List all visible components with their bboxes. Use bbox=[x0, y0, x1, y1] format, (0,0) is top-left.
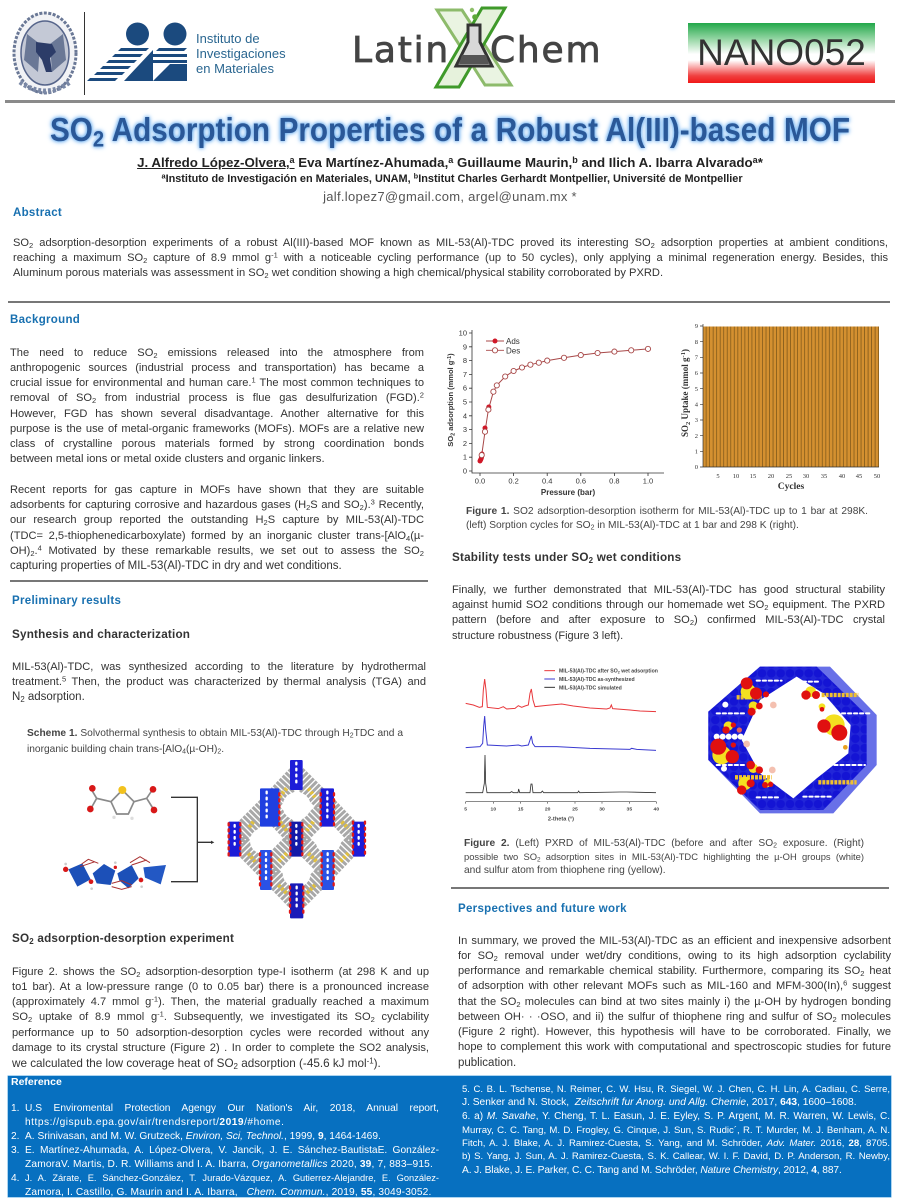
references 1 to 4: 1. bbox=[11, 1103, 20, 1114]
affiliations: aInstituto de Investigación en Materiales, UNAM, bInstitut Charles Gerhardt Montpellier, Université de Montpellier bbox=[161, 172, 743, 185]
text: stability tests: Finally, we further demonstrated that MIL-53(Al)-TDC has good structural stability bbox=[452, 584, 885, 596]
text: background paragraph 2: adsorbents for capturing corrosive and hazardous gases (H2S and SO2).3 Recently, bbox=[10, 498, 424, 512]
chart: SO2 uptake over cycles bbox=[680, 323, 880, 492]
text: adsorption experiment: performance up to 50 adsorption-desorption cycles were recorded without any bbox=[12, 1027, 429, 1039]
divider: background bbox=[10, 580, 428, 582]
chart: SO2 uptake over cycles: 5 bbox=[695, 386, 698, 393]
heading: Reference: Reference bbox=[11, 1076, 62, 1088]
chart: SO2 uptake over cycles: 2 bbox=[695, 433, 698, 440]
chart: SO2 adsorption isotherm: 2 bbox=[450, 433, 456, 436]
references 1 to 4: ZamoraV. Martis, D. R. Williams and I. A. Ibarra, Organometallics 2020, 39, 7, 883–915. bbox=[25, 1159, 433, 1170]
chart: PXRD patterns: 40 bbox=[654, 806, 659, 812]
text: adsorption experiment bbox=[12, 966, 429, 1071]
chart: PXRD patterns: 10 bbox=[491, 806, 496, 812]
caption: Figure 1: Figure 1. SO2 adsorption-desorption isotherm for MIL-53(Al)-TDC up to 1 bar at 298K. bbox=[466, 506, 868, 517]
chart: PXRD patterns: 15 bbox=[518, 806, 524, 812]
MOF lattice bbox=[228, 760, 365, 918]
references 1 to 4: E. Martínez-Ahumada, A. López-Olvera, V. Jancik, J. E. Sánchez-BautistaE. González- bbox=[25, 1145, 439, 1156]
logo: IIM Instituto de Investigaciones en Materiales: Instituto de bbox=[196, 31, 260, 46]
chart: SO2 adsorption isotherm: 2 bbox=[463, 439, 467, 448]
text: perspectives: for SO2 removal under wet/dry conditions, owing to its high adsorption cyclability bbox=[458, 950, 891, 963]
chart: SO2 adsorption isotherm: 10 bbox=[459, 328, 467, 338]
chart: SO2 uptake over cycles: 25 bbox=[786, 473, 792, 480]
chart: PXRD patterns: MIL-53(Al)-TDC as-synthesized bbox=[559, 677, 635, 683]
chart: SO2 uptake over cycles: 8 bbox=[695, 339, 698, 346]
text: perspectives: performance and remarkable chemical stability. Furthermore, comparing its SO2 heat bbox=[458, 965, 891, 978]
caption: Scheme 1: Scheme 1. Solvothermal synthesis to obtain MIL-53(Al)-TDC through H2TDC and a bbox=[27, 728, 403, 740]
chart: SO2 adsorption isotherm: 9 bbox=[463, 342, 467, 351]
chart: SO2 uptake over cycles: 15 bbox=[750, 473, 756, 480]
text: background paragraph 1: anthropogenic sources (industrial process and transportation) has became a bbox=[10, 362, 424, 374]
chart: SO2 adsorption isotherm: 0.2 bbox=[508, 476, 519, 486]
chart: SO2 uptake over cycles: Cycles bbox=[778, 482, 804, 492]
chart: SO2 uptake over cycles: Uptake (mmol g bbox=[680, 357, 690, 422]
chart: SO2 adsorption isotherm: 0.8 bbox=[609, 476, 620, 486]
logo: LatinXChem bbox=[352, 6, 602, 88]
divider: header bbox=[5, 100, 895, 103]
caption: Figure 1 bbox=[466, 506, 868, 532]
references 1 to 4 bbox=[11, 1103, 439, 1198]
text: abstract: Aluminum porous materials was assessment in SO2 wet condition showing a high chemical/physical stability corroborated by PXRD. bbox=[13, 267, 663, 280]
references 1 to 4: Zamora, I. Castillo, G. Maurin and I. A. Ibarra, Chem. Commun., 2019, 55, 3049-3052. bbox=[25, 1187, 431, 1198]
references 5 and 6: Murray, C. C. Tang, M. D. Frogley, G. Cinque, J. Sun, S. Rudic´, R. T. Murder, M. J. Benham, A. N. bbox=[462, 1125, 890, 1136]
chart: SO2 uptake over cycles: 7 bbox=[695, 354, 699, 362]
chart: PXRD patterns: 25 bbox=[572, 806, 578, 812]
chart: SO2 adsorption isotherm: 1 bbox=[463, 453, 467, 462]
chart: SO2 uptake over cycles: SO bbox=[680, 425, 690, 437]
logo: IIM Instituto de Investigaciones en Materiales bbox=[87, 22, 286, 81]
text: background paragraph 1: class of crystalline porous materials formed by strong coordination bonds bbox=[10, 438, 424, 450]
heading: Preliminary results: Preliminary results bbox=[12, 595, 121, 607]
text: background paragraph 2: (TDC= 2,5-thiophenedicarboxylate) formed by an inorganic cluster trans-[AlO4(µ- bbox=[10, 530, 424, 543]
text: perspectives: of adsorption with other relevant MOFs such as MIL-160 and MFM-300(In),6 suggest bbox=[458, 979, 891, 992]
caption: Scheme 1 bbox=[27, 728, 404, 756]
text: adsorption experiment: to1 bar). At a low-pressure range (0 to 0.05 bar) there is a pronounced increase bbox=[12, 981, 429, 993]
arrow: reaction bracket bbox=[171, 797, 214, 882]
chart: SO2 adsorption isotherm: 0 bbox=[463, 466, 467, 476]
text: perspectives: In summary, we proved the MIL-53(Al)-TDC as an efficient and inexpensive adsorbent bbox=[458, 935, 891, 947]
chart: PXRD patterns: wet adsorption bbox=[620, 669, 658, 675]
text: background paragraph 1: removal of SO2 from industrial process is flue gas desulfurization (FGD).2 bbox=[10, 391, 424, 405]
figure: SO2 adsorption sites in pore bbox=[708, 666, 877, 814]
chart: SO2 uptake over cycles: 6 bbox=[695, 370, 699, 377]
caption: Figure 2: possible two SO2 adsorption sites in MIL-53(Al)-TDC highlighting the µ-OH groups (white) bbox=[464, 851, 864, 864]
text: background paragraph 1: The need to reduce SO2 emissions released into the atmosphere from bbox=[10, 347, 424, 360]
references 5 and 6: Fitch, A. J. Blake, A. J. Ramirez-Cuesta, S. Yang, and M. Schröder, Adv. Mater. 2016, 28, 8705. bbox=[462, 1138, 890, 1149]
chart: SO2 uptake over cycles: 2 bbox=[685, 422, 692, 425]
chart: SO2 uptake over cycles: 10 bbox=[733, 473, 739, 480]
references 1 to 4: A. Srinivasan, and M. W. Grutzeck, Environ, Sci, Technol., 1999, 9, 1464-1469. bbox=[25, 1131, 381, 1142]
chart: PXRD patterns bbox=[464, 668, 659, 823]
references 5 and 6: J. Senker and N. Stock, Zeitschrift fur Anorg. und Allg. Chemie, 2017, 643, 1600–1608. bbox=[462, 1097, 857, 1108]
caption: Figure 2 bbox=[464, 838, 864, 876]
text: background paragraph 2: capturing properties of MIL-53(Al)-TDC in dry and wet conditions. bbox=[10, 560, 342, 572]
text: adsorption experiment: Figure 2. shows the SO2 adsorption-desorption type-I isotherm (at 298 K and up bbox=[12, 966, 429, 979]
text: synthesis bbox=[12, 661, 426, 704]
chart: SO2 uptake over cycles: 35 bbox=[821, 473, 827, 480]
text: background paragraph 1 bbox=[10, 347, 424, 465]
authors: J. Alfredo López-Olvera,a Eva Martínez-Ahumada,a Guillaume Maurin,b and Ilich A. Ibarra Alvaradoa* bbox=[137, 155, 763, 170]
chart: SO2 adsorption isotherm: Pressure (bar) bbox=[541, 488, 595, 497]
text: abstract: SO2 adsorption-desorption experiments of a robust Al(III)-based MOF known as MIL-53(Al)-TDC proved its interesting SO2 adsorption properties at ambient conditions, bbox=[13, 237, 888, 250]
chart: SO2 uptake over cycles: 0 bbox=[695, 464, 698, 471]
figure: scheme 1 synthesis diagram bbox=[63, 760, 366, 918]
chart: SO2 uptake over cycles: 9 bbox=[695, 323, 698, 330]
chart: SO2 adsorption isotherm: SO bbox=[446, 436, 455, 447]
references 1 to 4: J. A. Zárate, E. Sánchez-González, T. Jurado-Vázquez, A. Gutierrez-Alejandre, E. González- bbox=[25, 1173, 439, 1183]
references 5 and 6: A. J. Blake, J. E. Parker, C. C. Tang and M. Schröder, Nature Chemistry, 2012, 4, 887. bbox=[462, 1165, 842, 1176]
chart: SO2 uptake over cycles: 20 bbox=[768, 473, 774, 480]
chart: SO2 adsorption isotherm: Ads bbox=[506, 337, 520, 346]
caption: Figure 1: (left) Sorption cycles for SO2 in MIL-53(Al)-TDC at 1 bar and 298 K (right). bbox=[466, 520, 799, 532]
chart: SO2 adsorption isotherm: 8 bbox=[463, 356, 467, 365]
references 5 and 6: b) S. Yang, J. Sun, A. J. Ramirez-Cuesta, S. K. Callear, W. I. F. David, D. P. Anderson, R. Newby, bbox=[462, 1151, 890, 1162]
chart: PXRD patterns: 2 bbox=[618, 671, 620, 675]
text: perspectives: that the SO2 molecules can bind at two sites mainly i) the µ-OH by hydrogen bonding bbox=[458, 996, 891, 1009]
text: adsorption experiment: SO2 uptake of 8.9 mmol g-1. Subsequently, we investigated its SO2 cyclability bbox=[12, 1010, 429, 1024]
text: stability tests: structure robustness (Figure 3 left). bbox=[452, 630, 623, 642]
chart: SO2 uptake over cycles: 40 bbox=[839, 473, 845, 480]
divider: perspectives bbox=[451, 887, 889, 889]
text: adsorption experiment: we calculated the low coverage heat of SO2 adsorption (-45.6 kJ mol-1). bbox=[12, 1056, 381, 1071]
chart: PXRD patterns: 2-theta (°) bbox=[548, 817, 574, 823]
text: adsorption experiment: damage to its crystal structure (Figure 2) . In order to complete the SO2 analysis, bbox=[12, 1042, 429, 1054]
references 1 to 4: 2. bbox=[11, 1131, 20, 1142]
chart: SO2 adsorption isotherm: adsorption (mmol g bbox=[446, 360, 455, 433]
chart: SO2 adsorption isotherm bbox=[446, 328, 664, 497]
divider: abstract bbox=[8, 301, 890, 303]
chart: SO2 adsorption isotherm: 3 bbox=[463, 425, 467, 434]
chart: SO2 uptake over cycles: 5 bbox=[716, 473, 720, 480]
subheading: SO2 adsorption-desorption experiment: SO2 adsorption-desorption experiment bbox=[12, 932, 234, 946]
chart: SO2 uptake over cycles: 1 bbox=[695, 448, 698, 456]
text: abstract bbox=[13, 237, 888, 280]
chart: SO2 adsorption isotherm: 7 bbox=[463, 370, 467, 379]
heading: Abstract: Abstract bbox=[13, 207, 62, 219]
title: SO2 Adsorption Properties of a Robust Al(III)-based MOF bbox=[50, 112, 850, 152]
chart: SO2 uptake over cycles: -1 bbox=[680, 352, 687, 357]
chart: PXRD patterns: MIL-53(Al)-TDC simulated bbox=[559, 685, 622, 691]
badge: NANO052 bbox=[688, 23, 875, 83]
badge: NANO052: NANO052 bbox=[697, 32, 866, 73]
chart: PXRD patterns: MIL-53(Al)-TDC after SO bbox=[559, 669, 618, 675]
heading: Background: Background bbox=[10, 314, 80, 326]
chart: SO2 adsorption isotherm: 4 bbox=[463, 411, 467, 420]
text: adsorption experiment: (approximately 4.7 mmol g-1). Then, the material gradually reached a maximum bbox=[12, 995, 429, 1008]
text: stability tests: against humid SO2 conditions through our homemade wet SO2 equipment. The PXRD bbox=[452, 599, 885, 612]
text: background paragraph 2: Recent reports for gas capture in MOFs have shown that they are suitable bbox=[10, 484, 424, 496]
logo: IIM Instituto de Investigaciones en Materiales: Investigaciones bbox=[196, 46, 286, 61]
chart: PXRD patterns: 5 bbox=[464, 806, 467, 812]
references 1 to 4: 4. bbox=[11, 1173, 20, 1184]
chart: SO2 uptake over cycles: 3 bbox=[695, 417, 698, 424]
panel: references bbox=[8, 1076, 891, 1197]
chart: SO2 uptake over cycles: 50 bbox=[874, 473, 880, 480]
subheading: Stability tests: Stability tests under SO2 wet conditions bbox=[452, 551, 681, 565]
logo: UNAM seal bbox=[12, 12, 78, 94]
chart: SO2 adsorption isotherm: 0.4 bbox=[542, 476, 552, 486]
chart: SO2 uptake over cycles: ) bbox=[680, 349, 690, 352]
references 1 to 4: 3. bbox=[11, 1145, 20, 1156]
logo: IIM Instituto de Investigaciones en Materiales: en Materiales bbox=[196, 61, 274, 76]
references 1 to 4: https://gispub.epa.gov/air/trendsreport/2019/#home. bbox=[25, 1117, 284, 1128]
text: background paragraph 2: OH)2.4 Motivated by these remarkable results, we set out to assess the SO2 bbox=[10, 544, 424, 558]
chart: PXRD patterns: 20 bbox=[545, 806, 551, 812]
references 5 and 6: 5. C. B. L. Tschense, N. Reimer, C. W. Hsu, R. Siegel, W. J. Chen, C. H. Lin, A. Cadiau, C. Serre, bbox=[462, 1084, 890, 1095]
text: perspectives: (Figure 2 right). However, this hypothesis will have to be corroborated. Finally, we bbox=[458, 1026, 891, 1038]
text: background paragraph 1: However, FGD has shown several disadvantage. Another alternative for this bbox=[10, 408, 424, 420]
chart: SO2 adsorption isotherm: Des bbox=[506, 346, 520, 355]
subheading: Synthesis and characterization: Synthesis and characterization bbox=[12, 628, 190, 641]
text: background paragraph 2: our research group reported the outstanding H2S capture by MIL-53(Al)-TDC bbox=[10, 514, 424, 527]
chart: SO2 uptake over cycles: 30 bbox=[803, 473, 809, 480]
text: synthesis: N2 adsorption. bbox=[12, 691, 85, 704]
divider: logos bbox=[84, 12, 85, 95]
chart: SO2 uptake over cycles: 4 bbox=[695, 402, 699, 408]
text: stability tests bbox=[452, 584, 885, 642]
chart: SO2 adsorption isotherm: 5 bbox=[463, 398, 467, 406]
text: perspectives: between OH· · ·OSO, and ii) the sulfur of thiophene ring and sulfur of SO2 molecules bbox=[458, 1011, 891, 1024]
text: perspectives: hope to complement this work with computational and spectroscopic studies for future bbox=[458, 1041, 891, 1053]
text: perspectives bbox=[458, 935, 891, 1069]
text: background paragraph 1: between metal ions or metal oxide clusters and organic linkers. bbox=[10, 453, 325, 465]
logo: LatinXChem: Latin bbox=[352, 30, 450, 71]
chart: SO2 uptake over cycles: 45 bbox=[856, 473, 862, 480]
thiophene molecule bbox=[87, 785, 157, 820]
caption: Figure 2: Figure 2. (Left) PXRD of MIL-53(Al)-TDC (before and after SO2 exposure. (Right) bbox=[464, 838, 864, 850]
text: perspectives: publication. bbox=[458, 1057, 516, 1069]
SO2 molecules bbox=[710, 677, 848, 795]
text: stability tests: pattern (before and after exposure to SO2) confirmed MIL-53(Al)-TDC crystal bbox=[452, 614, 885, 627]
text: synthesis: MIL-53(Al)-TDC, was synthesized according to the literature by hydrothermal bbox=[12, 661, 426, 673]
chart: SO2 adsorption isotherm: -1 bbox=[447, 356, 453, 361]
logo: LatinXChem: Chem bbox=[490, 30, 602, 71]
emails: jalf.lopez7@gmail.com, argel@unam.mx * bbox=[323, 189, 577, 204]
inorganic chain polyhedra bbox=[63, 857, 166, 890]
text: background paragraph 1: crucial issue for environmental and human care.1 The most common techniques to bbox=[10, 376, 424, 389]
references 5 and 6 bbox=[462, 1084, 890, 1176]
caption: Scheme 1: inorganic building chain trans-[AlO4(µ-OH)2. bbox=[27, 744, 224, 756]
chart: PXRD patterns: 35 bbox=[627, 806, 632, 812]
text: abstract: reaching a maximum SO2 capture of 8.9 mmol g-1 with a noticeable cycling performance (up to 50 cycles), only applying a minimal regeneration energy. Besides, this bbox=[13, 251, 888, 265]
chart: SO2 adsorption isotherm: 0.6 bbox=[576, 476, 586, 486]
caption: Figure 2: and sulfur atom from thiophene ring (yellow). bbox=[464, 865, 666, 876]
chart: SO2 adsorption isotherm: 0.0 bbox=[475, 476, 485, 486]
references 1 to 4: U.S Enviromental Protection Agengy Our Nation's Air, 2018, Annual report, bbox=[25, 1103, 439, 1114]
chart: SO2 adsorption isotherm: 6 bbox=[463, 384, 467, 393]
text: background paragraph 1: purpose is the use of metal-organic frameworks (MOFs). MOFs are a relative new bbox=[10, 423, 424, 435]
chart: SO2 adsorption isotherm: 1.0 bbox=[643, 476, 653, 486]
references 5 and 6: 6. a) M. Savahe, Y. Cheng, T. L. Easun, J. E. Eyley, S. P. Argent, M. R. Warren, W. Lewis, C. bbox=[462, 1111, 890, 1122]
text: background paragraph 2 bbox=[10, 484, 424, 572]
heading: Perspectives and future work: Perspectives and future work bbox=[458, 903, 627, 915]
chart: SO2 adsorption isotherm: ) bbox=[446, 353, 455, 356]
text: synthesis: treatment.5 Then, the product was characterized by thermal analysis (TGA) and bbox=[12, 675, 426, 688]
chart: PXRD patterns: 30 bbox=[599, 806, 605, 812]
